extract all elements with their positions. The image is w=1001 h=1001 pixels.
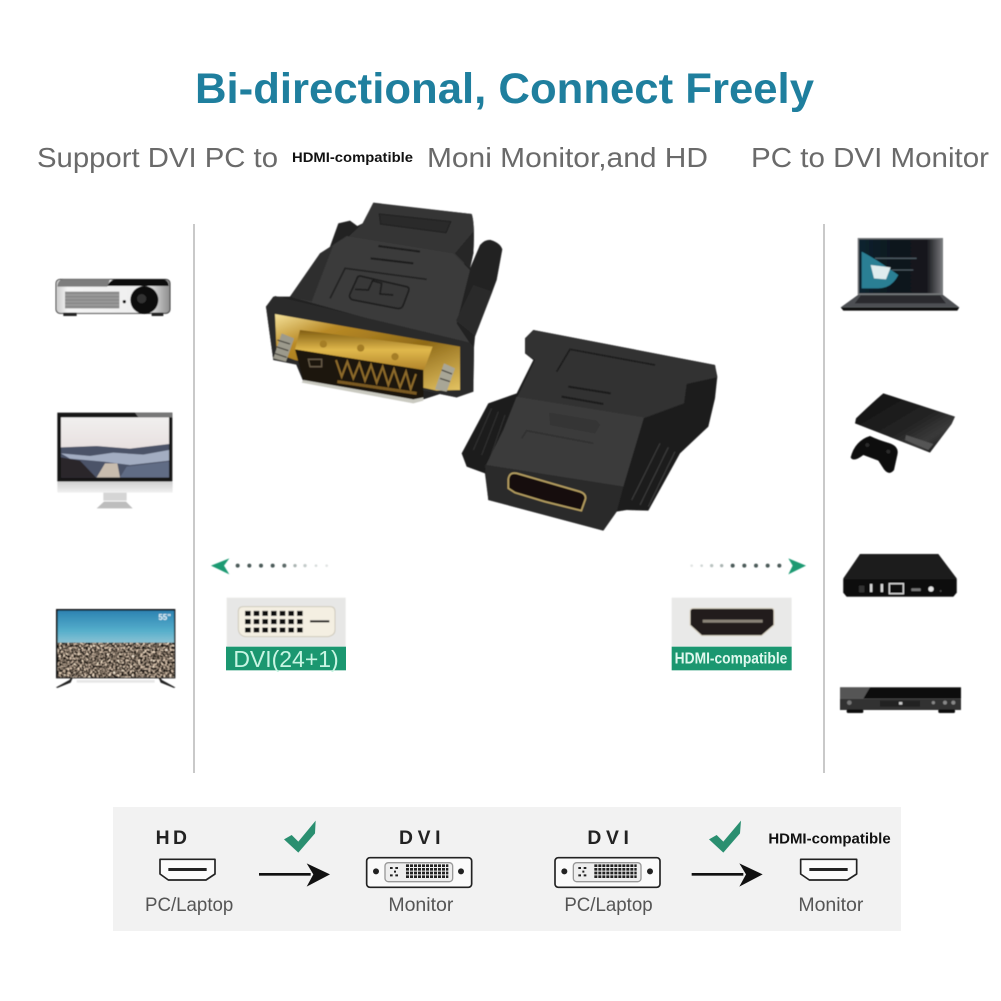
arrow: left dotted [211,558,328,574]
panel: display devices [840,238,961,713]
label: HDMI-compatible: HDMI-compatible [768,831,891,847]
panel: source devices [56,279,175,688]
panel background [113,807,901,931]
icon: green check [709,821,741,853]
subtitle: Support DVI PC to [37,142,278,173]
subtitle: PC to DVI Monitor [751,142,989,173]
arrow: right dotted [690,558,806,574]
HDMI connector callout [672,558,806,670]
label: HDMI-compatible: HDMI-compatible [675,650,787,667]
icon: green check [284,821,316,853]
label: PC/Laptop: PC/Laptop [564,895,653,916]
icon: HDMI port photo [672,598,792,647]
adapter with gold DVI plug [266,203,502,403]
panel: connection diagrams [113,807,901,931]
icon: desktop monitor [57,413,173,508]
label: HD: HD [156,828,190,849]
diagram: HDMI PC to DVI monitor [145,821,472,916]
DVI connector callout [211,558,346,672]
subtitle: Moni Monitor,and HD [427,142,708,173]
left divider [193,224,195,773]
label: DVI: DVI [399,828,445,849]
icon: flat screen TV: 55" [158,613,171,622]
icon: laptop [841,238,959,311]
diagram: DVI PC to HDMI monitor [555,821,891,916]
icon: projector [56,279,170,316]
icon: DVD player [840,687,961,713]
product photo: adapters [266,203,717,531]
icon: game console [851,393,955,473]
icon: DVI port [367,858,472,887]
icon: DVI port [555,858,660,887]
label: Monitor: Monitor [798,895,864,916]
label: PC/Laptop: PC/Laptop [145,895,233,916]
icon: DVI port photo [227,598,346,647]
label: DVI(24+1): DVI(24+1) [233,646,339,672]
arrow: black [259,863,330,887]
arrow: black [692,863,763,887]
right divider [823,224,825,773]
title: Bi-directional, Connect Freely [195,65,814,113]
label: DVI: DVI [587,828,634,849]
adapter with HDMI socket [462,330,717,531]
subtitle: HDMI-compatible [292,149,413,165]
label: Monitor: Monitor [388,895,454,916]
subtitle [37,142,989,173]
icon: HDMI port [801,859,857,880]
icon: media box [843,554,957,597]
icon: HDMI port [160,859,215,880]
icon: flat screen TV [56,609,175,688]
